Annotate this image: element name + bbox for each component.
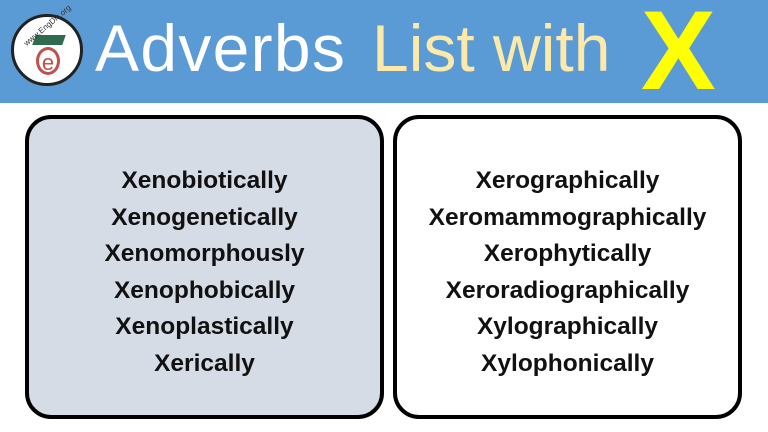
panel: left list: Xenogenetically [111, 204, 298, 231]
panel: right list: Xerophytically [484, 240, 651, 267]
logo [11, 14, 83, 86]
logo: www.EngDic.org [22, 3, 73, 48]
panel: left list: Xenoplastically [115, 313, 294, 340]
panel: right list: Xeromammographically [429, 204, 706, 231]
panel: right list: Xeroradiographically [446, 277, 689, 304]
header banner: Adverbs [95, 11, 346, 85]
panel: left list: Xenomorphously [104, 240, 305, 267]
panel: left list: Xenophobically [114, 277, 295, 304]
panel: left list [25, 115, 384, 419]
panel: right list [393, 115, 742, 419]
header banner [0, 0, 768, 103]
header banner: List with [372, 11, 610, 85]
panel: left list: Xenobiotically [121, 167, 288, 194]
panel: right list: Xylophonically [481, 350, 654, 377]
panel: right list: Xylographically [477, 313, 658, 340]
logo: e [42, 50, 54, 75]
title [95, 0, 716, 113]
panel: right list: Xerographically [476, 167, 659, 194]
panel: left list: Xerically [154, 350, 255, 377]
